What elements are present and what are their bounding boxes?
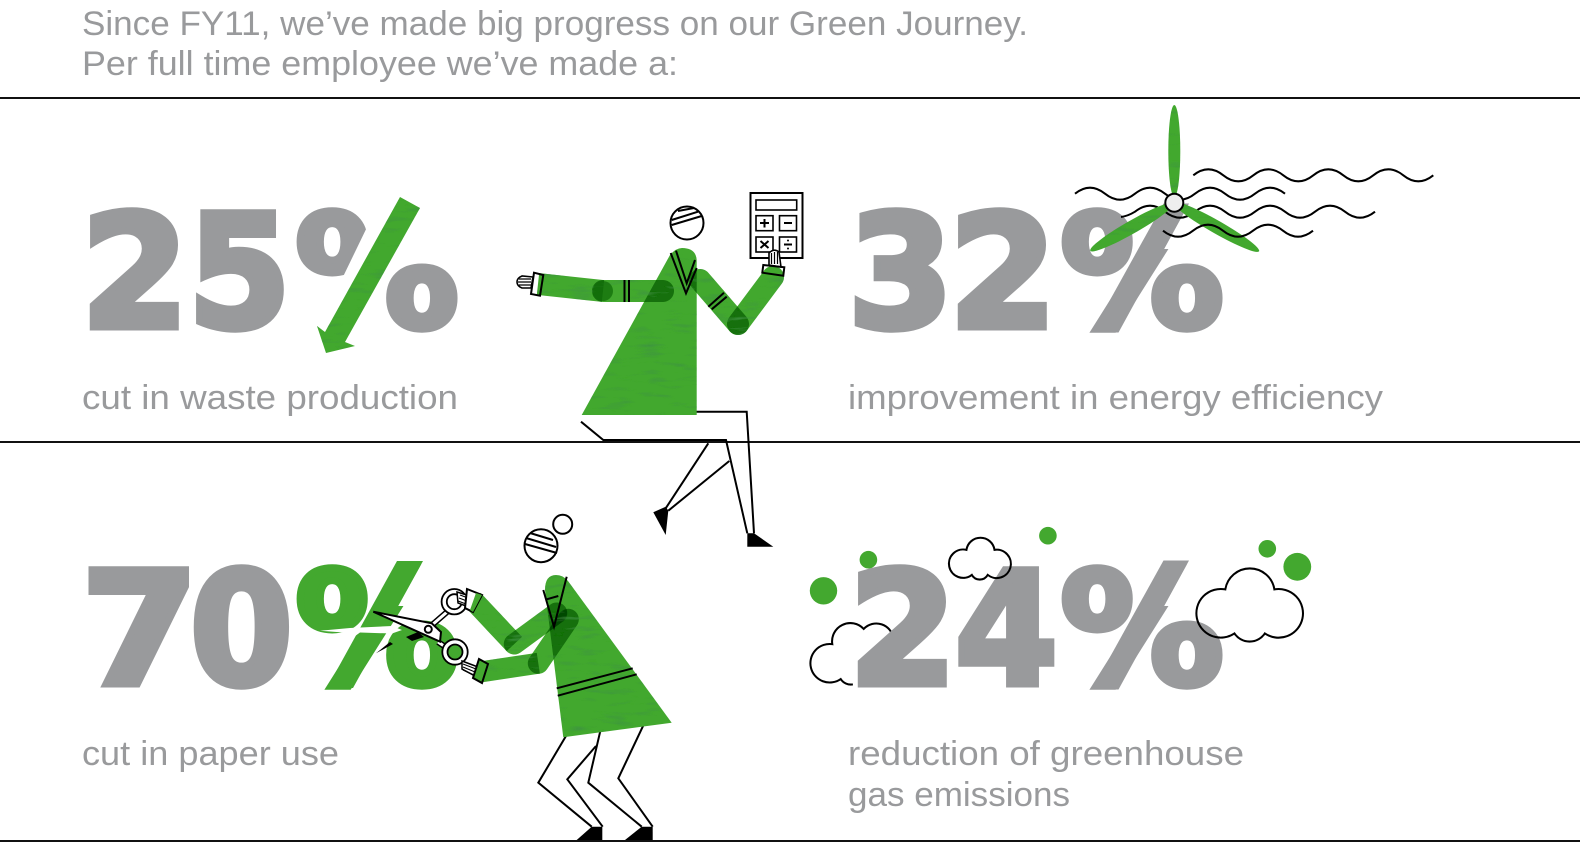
intro heading: Per full time employee we’ve made a: — [82, 45, 678, 83]
intro heading: Since FY11, we’ve made big progress on our Green Journey. — [82, 5, 1028, 43]
legs — [581, 412, 773, 547]
label: emissions — [848, 735, 1244, 814]
figure: person with scissors — [373, 515, 672, 840]
right hand and cuff — [762, 250, 784, 276]
number 70 percent: % — [295, 538, 459, 721]
number 25 percent: 2 — [81, 181, 189, 364]
number 25 percent — [81, 181, 459, 364]
elbow shade — [593, 281, 613, 301]
number 32 percent: % — [1060, 181, 1224, 364]
head with thought bubble — [524, 515, 572, 562]
slash top knockout — [1160, 552, 1210, 606]
panel: waste statistic — [81, 181, 459, 417]
percent slash thickening — [1092, 204, 1189, 332]
number 70 percent: 0 — [190, 539, 293, 721]
icon: left cloud — [810, 623, 893, 685]
label: emissions: reduction of greenhouse — [848, 735, 1244, 773]
intro heading — [82, 5, 1028, 83]
label: energy: improvement in energy efficiency — [848, 379, 1383, 417]
legs — [538, 708, 653, 840]
number 70 percent: 7 — [81, 540, 199, 721]
slash top knockout — [1160, 195, 1210, 249]
number 32 percent: 3 — [848, 183, 953, 365]
dress stripes and collar — [543, 577, 637, 696]
icon: green down arrow — [317, 197, 420, 353]
figure: person with calculator — [517, 193, 802, 547]
paper tear gap — [320, 626, 402, 644]
left hand and cuff — [517, 273, 543, 296]
panel: energy statistic — [848, 181, 1383, 417]
icon: calculator — [750, 193, 802, 258]
slash knockout behind arrow — [310, 190, 440, 345]
green dress and arms — [538, 248, 773, 415]
number 70 percent — [81, 538, 459, 721]
icon: right cloud — [1196, 568, 1303, 642]
label: emissions: gas emissions — [848, 776, 1070, 814]
icon: wind turbine and waves — [1075, 105, 1433, 257]
hands and cuffs — [457, 589, 488, 683]
number 24 percent: 4 — [955, 539, 1058, 721]
label: waste: cut in waste production — [82, 379, 458, 417]
slash top knockout — [394, 552, 444, 606]
icon: scissors — [373, 589, 468, 665]
green percent slash — [327, 561, 423, 688]
icon: green emission dots — [810, 527, 1311, 604]
number 24 percent: % — [1060, 538, 1224, 721]
number 25 percent: 5 — [188, 182, 291, 364]
collar and sleeve stripes — [624, 251, 727, 309]
number 32 percent: 2 — [949, 181, 1057, 364]
head — [670, 206, 704, 240]
panel: emissions statistic — [810, 527, 1311, 814]
number 25 percent: % — [295, 181, 459, 364]
icon: top cloud — [949, 538, 1011, 580]
label: paper: cut in paper use — [82, 735, 339, 773]
percent slash thickening — [1092, 560, 1189, 690]
number 24 percent: 2 — [849, 538, 957, 721]
panel: paper statistic — [81, 538, 459, 773]
number 32 percent — [848, 181, 1224, 365]
number 24 percent — [849, 538, 1224, 721]
green dress and arms — [473, 575, 672, 737]
